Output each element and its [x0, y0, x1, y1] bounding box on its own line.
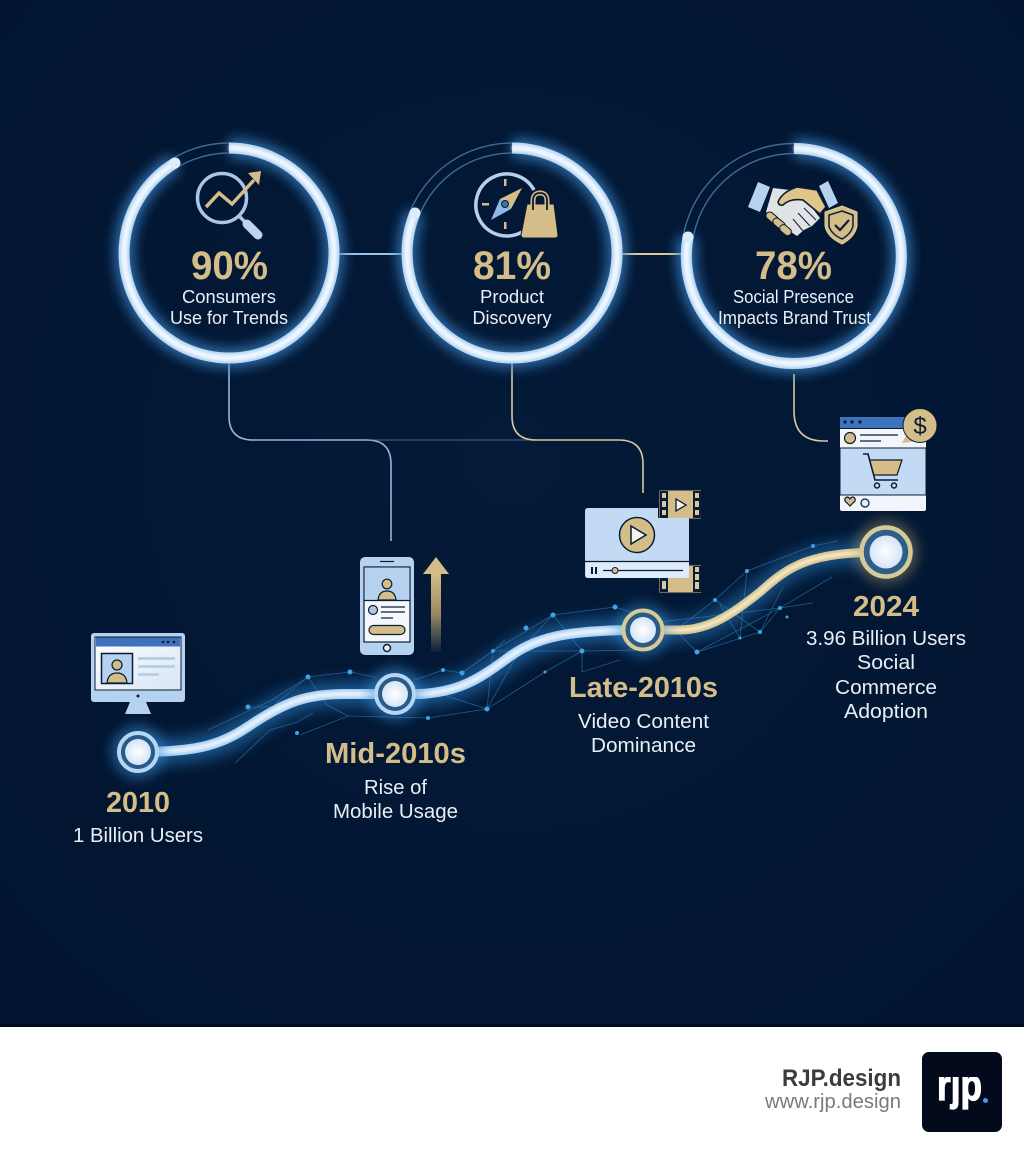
timeline label: 2024: Adoption — [844, 701, 928, 723]
icon: smartphone — [360, 557, 414, 655]
timeline label: 2010: 1 Billion Users — [73, 825, 203, 847]
connector: faint link across — [367, 439, 535, 441]
panel: 78% brand trust — [682, 144, 906, 368]
icon: upward arrow — [423, 557, 449, 652]
node: 2010 — [111, 725, 165, 779]
icon: handshake and shield — [748, 181, 857, 244]
connector: circle 1 to circle 2 — [339, 253, 402, 255]
network nodes — [246, 544, 815, 735]
timeline curve — [138, 552, 886, 752]
panel: 90% consumers — [119, 143, 339, 363]
connector: 78% circle to 2024 — [794, 374, 828, 441]
timeline label: 2024 — [806, 591, 966, 723]
timeline label: late-2010s — [569, 672, 718, 757]
timeline label: 2024: 3.96 Billion Users — [806, 628, 966, 650]
label: social presence impacts brand trust: Social Presence — [733, 287, 854, 307]
icon: video player with film strips — [585, 490, 702, 593]
icon: magnifier with trend arrow — [198, 171, 261, 235]
connector: 90% circle to mid-2010s — [229, 363, 391, 541]
ring: 78 percent — [682, 144, 906, 368]
label: product discovery — [472, 287, 552, 328]
timeline label: 2024: Social — [857, 652, 915, 674]
timeline label: 2024: Commerce — [835, 677, 937, 699]
connector: circle 2 to circle 3 — [622, 253, 682, 255]
connector: 81% circle to late-2010s — [512, 363, 643, 493]
label: consumers use for trends — [170, 287, 288, 328]
ring: 81 percent — [402, 143, 622, 363]
footer logo — [922, 1052, 1002, 1132]
timeline label: mid-2010s: Mobile Usage — [333, 801, 458, 823]
footer brand text: RJP.design — [782, 1065, 901, 1092]
label: consumers use for trends: Consumers — [182, 287, 276, 307]
label: product discovery: Discovery — [472, 308, 552, 328]
label: social presence impacts brand trust — [718, 287, 871, 328]
node: 2024 — [854, 520, 918, 584]
timeline label: late-2010s: Late-2010s — [569, 672, 718, 704]
icon: desktop monitor — [91, 633, 185, 714]
footer brand text: www.rjp.design — [764, 1091, 901, 1113]
stat: 90%: 90% — [191, 244, 268, 288]
timeline label: mid-2010s: Mid-2010s — [325, 738, 466, 770]
timeline label: 2010 — [73, 787, 203, 847]
footer logo: rjp — [937, 1061, 982, 1110]
label: social presence impacts brand trust: Impacts Brand Trust — [718, 308, 871, 328]
node: mid-2010s — [368, 667, 422, 721]
timeline label: late-2010s: Video Content — [578, 711, 709, 733]
stat: 78%: 78% — [755, 244, 832, 288]
timeline label: mid-2010s — [325, 738, 466, 823]
timeline label: 2010: 2010 — [106, 787, 170, 819]
ring: 90 percent — [119, 143, 339, 363]
panel: 81% product discovery — [402, 143, 622, 363]
footer band — [0, 1027, 1024, 1154]
node: late-2010s — [616, 603, 670, 657]
timeline label: 2024: 2024 — [853, 591, 919, 623]
network mesh behind timeline — [208, 541, 838, 763]
icon: social commerce window: $ — [913, 413, 927, 440]
timeline label: late-2010s: Dominance — [591, 735, 696, 757]
label: consumers use for trends: Use for Trends — [170, 308, 288, 328]
icon: compass and shopping bag — [476, 174, 558, 238]
icon: social commerce window — [840, 408, 937, 511]
stat: 81%: 81% — [473, 244, 551, 288]
label: product discovery: Product — [480, 287, 544, 307]
timeline label: mid-2010s: Rise of — [364, 777, 427, 799]
footer brand text — [764, 1065, 901, 1113]
